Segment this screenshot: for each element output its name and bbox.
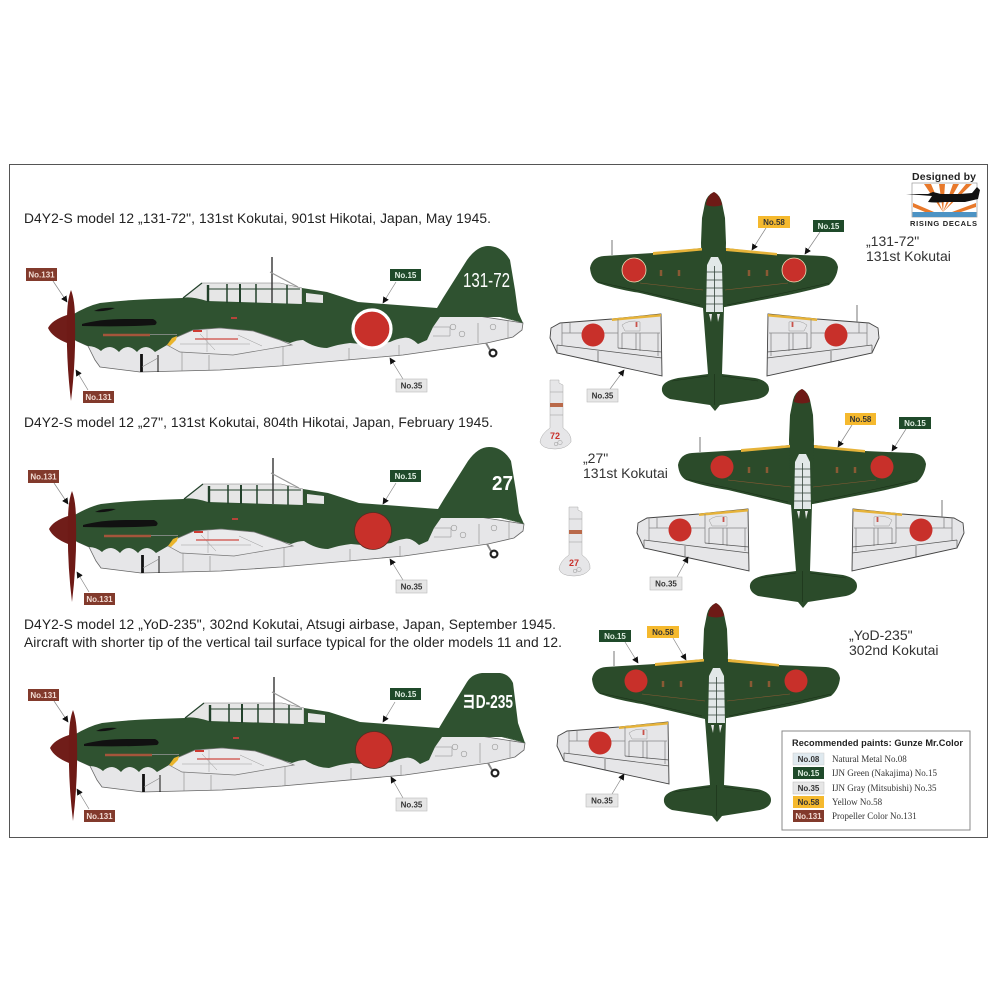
aircraft name: 131-72: „131-72" bbox=[866, 233, 919, 249]
shorter tail fin bbox=[439, 673, 525, 743]
paint labels: No.15 bbox=[395, 271, 417, 280]
paint labels: No.58 bbox=[763, 218, 785, 227]
paint labels bbox=[26, 216, 931, 822]
roundel bbox=[353, 310, 391, 348]
aircraft name: YoD-235: 302nd Kokutai bbox=[849, 642, 939, 658]
paint labels: No.58 bbox=[652, 628, 674, 637]
legend: recommended paints: Propeller Color No.131 bbox=[832, 811, 917, 821]
roundel bbox=[354, 512, 392, 550]
underside wing: aircraft YoD-235 bbox=[557, 722, 669, 784]
paint labels: No.131 bbox=[86, 812, 113, 821]
side view: aircraft YoD-235 bbox=[50, 673, 525, 821]
legend: recommended paints: No.131 bbox=[795, 812, 822, 821]
paint labels: No.15 bbox=[904, 419, 926, 428]
aircraft name: YoD-235: „YoD-235" bbox=[849, 627, 913, 643]
tail code: ヨD-235 bbox=[462, 692, 513, 712]
paint labels: No.131 bbox=[30, 472, 57, 482]
tail detail: 72 bbox=[540, 380, 571, 449]
side view: aircraft 131-72 bbox=[48, 246, 523, 401]
paint labels: No.131 bbox=[86, 595, 113, 604]
legend: recommended paints: No.35 bbox=[798, 784, 820, 793]
roundel bbox=[356, 732, 392, 768]
underside wings: aircraft 27 bbox=[637, 500, 964, 571]
paint labels: No.131 bbox=[85, 393, 112, 402]
legend: recommended paints: Yellow No.58 bbox=[832, 797, 883, 807]
logo: Rising Decals bbox=[906, 171, 980, 228]
heading: aircraft 3 bbox=[24, 617, 562, 650]
roundels bbox=[622, 258, 806, 282]
legend: recommended paints: No.58 bbox=[798, 798, 820, 807]
legend: recommended paints: Natural Metal No.08 bbox=[832, 754, 907, 764]
heading: aircraft 1: D4Y2-S model 12 „131-72", 131st Kokutai, 901st Hikotai, Japan, May 1945. bbox=[24, 211, 491, 226]
paint labels: No.15 bbox=[395, 472, 417, 481]
paint labels: No.58 bbox=[850, 415, 872, 424]
aircraft name: 131-72: 131st Kokutai bbox=[866, 248, 951, 264]
aircraft name: 131-72 bbox=[866, 233, 951, 264]
legend: recommended paints: No.15 bbox=[798, 769, 820, 778]
aircraft name: YoD-235 bbox=[849, 627, 939, 658]
side view: aircraft 27 bbox=[49, 447, 524, 602]
tail code: 131-72 bbox=[463, 270, 510, 292]
paint labels: No.35 bbox=[591, 796, 613, 806]
logo: Rising Decals: RISING DECALS bbox=[910, 219, 977, 228]
tail detail: 27: 27 bbox=[569, 558, 579, 568]
paint labels: No.15 bbox=[818, 222, 840, 231]
legend: recommended paints bbox=[782, 731, 970, 830]
paint labels: No.35 bbox=[401, 582, 423, 592]
paint callout arrows bbox=[53, 228, 906, 809]
paint labels: No.131 bbox=[30, 691, 57, 700]
top view: aircraft YoD-235 bbox=[592, 603, 840, 822]
tail code: 27 bbox=[492, 473, 513, 495]
legend: recommended paints: No.08 bbox=[798, 755, 820, 764]
paint labels: No.35 bbox=[592, 392, 614, 400]
heading: aircraft 3: D4Y2-S model 12 „YoD-235", 302nd Kokutai, Atsugi airbase, Japan, September 1945. bbox=[24, 617, 556, 632]
roundels bbox=[624, 670, 808, 692]
tail fin bbox=[438, 447, 524, 524]
logo: Rising Decals: Designed by bbox=[912, 171, 976, 183]
tail detail: 72: 72 bbox=[550, 431, 560, 441]
tail fin bbox=[437, 246, 523, 323]
paint labels: No.35 bbox=[401, 382, 423, 390]
heading: aircraft 2: D4Y2-S model 12 „27", 131st Kokutai, 804th Hikotai, Japan, February 1945. bbox=[24, 415, 493, 430]
legend: recommended paints: Recommended paints: Gunze Mr.Color bbox=[792, 738, 963, 748]
roundels bbox=[710, 456, 894, 478]
paint labels: No.131 bbox=[28, 270, 55, 280]
legend: recommended paints: IJN Gray (Mitsubishi) No.35 bbox=[832, 783, 937, 793]
top view: aircraft 131-72 bbox=[590, 192, 838, 411]
heading: aircraft 3: Aircraft with shorter tip of the vertical tail surface typical for the older models 11 and 12. bbox=[24, 635, 562, 650]
paint labels: No.15 bbox=[395, 690, 417, 699]
aircraft name: 27: 131st Kokutai bbox=[583, 465, 668, 481]
frame bbox=[10, 164, 988, 838]
tail detail: 27 bbox=[559, 507, 590, 576]
underside wings: aircraft 131-72 bbox=[550, 305, 879, 376]
top view: aircraft 27 bbox=[678, 389, 926, 608]
paint labels: No.35 bbox=[401, 800, 423, 810]
paint labels: No.15 bbox=[604, 632, 626, 641]
aircraft name: 27 bbox=[583, 450, 668, 481]
aircraft name: 27: „27" bbox=[583, 450, 608, 466]
paint labels: No.35 bbox=[655, 580, 677, 588]
legend: recommended paints: IJN Green (Nakajima) No.15 bbox=[832, 768, 937, 778]
